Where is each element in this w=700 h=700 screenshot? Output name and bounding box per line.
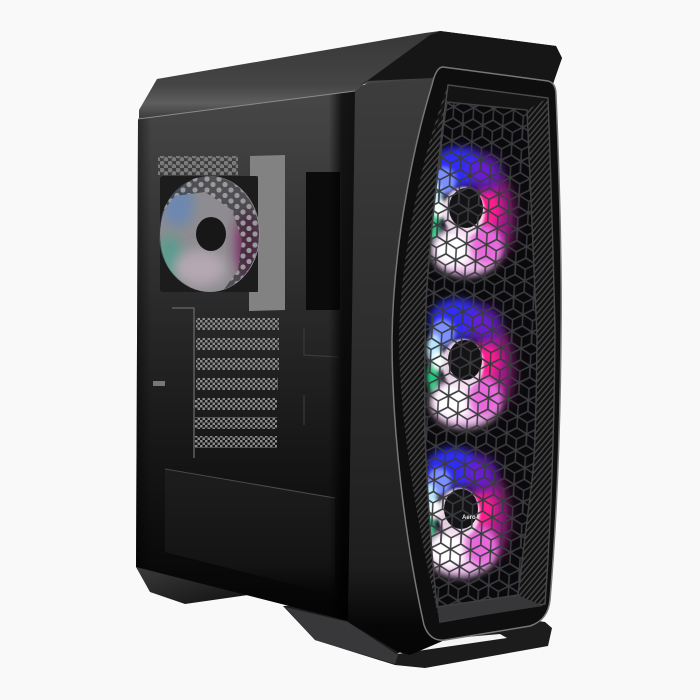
rear RGB fan: [158, 176, 262, 292]
illustration: RGB PC tower case product shot: [136, 31, 562, 668]
bezel top recess: [430, 85, 548, 147]
mesh border: [425, 102, 537, 607]
bottom fan: [423, 446, 508, 578]
cable tie slots: [304, 328, 338, 425]
front bezel outer: [392, 67, 561, 640]
hexagon mesh: [426, 102, 536, 606]
motherboard cutouts: [306, 172, 340, 310]
rear port: [153, 381, 165, 386]
front foot: [283, 600, 552, 668]
top fan: [428, 145, 513, 277]
top panel: [139, 31, 562, 119]
top front cap: [360, 31, 562, 86]
PCI expansion slots: [195, 318, 279, 448]
rear foot: [136, 567, 248, 604]
inner frame: [425, 85, 555, 622]
radiator bracket: [249, 155, 285, 311]
case side body: [348, 60, 445, 655]
fan grille crescent: [160, 176, 262, 292]
bezel bottom tray: [437, 595, 543, 622]
bezel carbon panel: [399, 85, 555, 622]
middle fan: [427, 297, 512, 429]
slot rail: [172, 308, 194, 458]
top fan bracket mesh: [158, 156, 238, 175]
front mesh with RGB fans: [426, 103, 536, 606]
PSU shroud: [165, 470, 335, 595]
glass side panel: [136, 91, 355, 621]
fan logo: Aero: [462, 515, 476, 521]
rear fan plate: [160, 176, 258, 292]
glass shading: [136, 91, 355, 621]
